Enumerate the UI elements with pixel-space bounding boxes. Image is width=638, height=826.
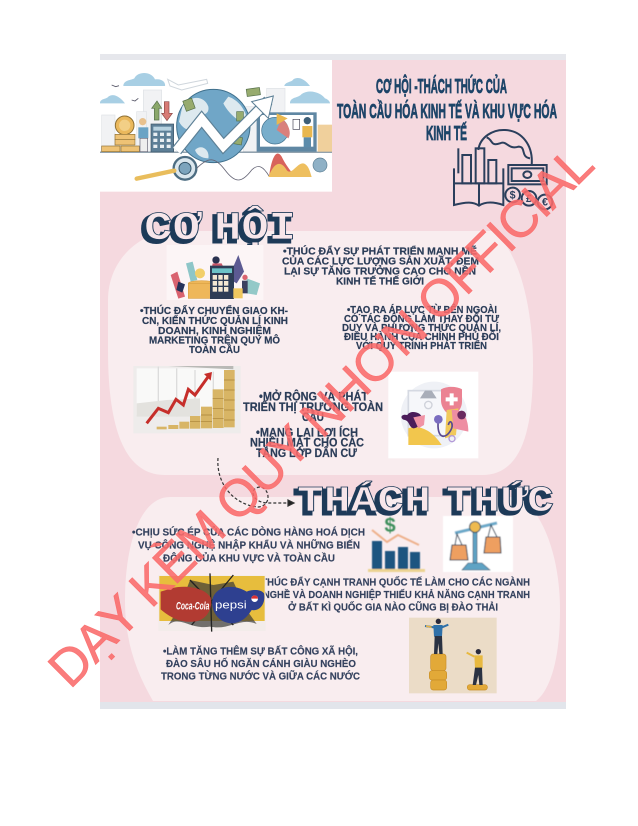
heading: opportunities [141, 204, 296, 255]
icon: globe, book, charts and money [454, 130, 552, 209]
text block: challenge, international competition: NGHỀ VÀ DOANH NGHIỆP THIẾU KHẢ NĂNG CẠNH TRANH [263, 588, 530, 601]
title: KINH TẾ [426, 122, 467, 145]
illustration: global economy header image [100, 60, 332, 192]
heading: opportunities: CƠ [144, 207, 203, 252]
panel: opportunities background [108, 231, 533, 475]
text block: opportunity, technology transfer: •THÚC ĐẨY CHUYỂN GIAO KH- [140, 304, 288, 317]
illustration: Coca-Cola versus Pepsi boxing gloves: pepsi [215, 600, 247, 612]
icon: balance scale with shopping bags [443, 516, 513, 572]
illustration: Coca-Cola versus Pepsi boxing gloves [158, 573, 266, 632]
text block: market expansion and benefits: •MANG LẠI LỢI ÍCH [256, 426, 358, 440]
text block: opportunity, external pressure [342, 303, 501, 352]
text block: market expansion and benefits: TẦNG LỚP DÂN CƯ [256, 447, 357, 460]
text block: challenge, social inequality: ĐÀO SÂU HỐ NGĂN CÁNH GIÀU NGHÈO [166, 656, 356, 670]
icon: globe, book, charts and money: € [542, 197, 548, 209]
text block: opportunity, external pressure: VỚI QUY TRÌNH PHÁT TRIỂN [356, 339, 487, 352]
heading: challenges: THỨC [443, 482, 551, 525]
title [337, 74, 557, 145]
text block: opportunity, external pressure: ĐIỀU HÀNH CỦA CHÍNH PHỦ ĐỐI [344, 329, 499, 343]
illustration: calculator and coins [167, 245, 263, 300]
text block: opportunity, technology transfer: CN, KIẾN THỨC QUẢN LÍ KINH [142, 314, 288, 327]
text block: market expansion and benefits: •MỞ RỘNG VÀ PHÁT [259, 390, 368, 404]
text block: opportunity, external pressure: DUY VÀ PHƯƠNG THỨC QUẢN LÍ, [342, 321, 501, 334]
text block: opportunity, technology transfer: MARKETING TRÊN QUY MÔ [149, 334, 280, 346]
arrow: dashed looped arrow to challenges heading [218, 458, 294, 507]
illustration: rising arrow and coin stacks [133, 366, 241, 433]
icon: globe, book, charts and money: $ [510, 190, 516, 202]
text block: opportunity, productive forces: •THÚC ĐẨY SỰ PHÁT TRIỂN MẠNH MẼ [283, 244, 477, 258]
text block: opportunity, productive forces: KINH TẾ THẾ GIỚI [336, 274, 424, 288]
text block: challenge, imported goods pressure: •CHỊU SỨC ÉP CỦA CÁC DÒNG HÀNG HOÁ DỊCH [132, 526, 365, 538]
text block: challenge, international competition: •THÚC ĐẨY CẠNH TRANH QUỐC TẾ LÀM CHO CÁC NGÀNH [258, 574, 530, 588]
heading: opportunities: CƠ [141, 210, 200, 255]
heading: challenges: THÁCH [294, 483, 428, 525]
watermark: DẠY KÈM QUY NHƠN OFFICIAL [38, 135, 605, 699]
text block: opportunity, productive forces: CỦA CÁC LỰC LƯỢNG SẢN XUẤT, ĐEM [282, 254, 479, 268]
text block: market expansion and benefits: CẦU [302, 411, 324, 424]
text block: challenge, social inequality: TRONG TỪNG NƯỚC VÀ GIỮA CÁC NƯỚC [161, 670, 360, 682]
text block: challenge, social inequality: •LÀM TĂNG THÊM SỰ BẤT CÔNG XÃ HỘI, [163, 644, 358, 658]
heading: challenges: THỨC [446, 479, 554, 522]
heading: opportunities: HỘI [214, 204, 296, 252]
text block: market expansion and benefits: TRIỂN THỊ TRƯỜNG TOÀN [243, 401, 383, 414]
text block: challenge, imported goods pressure: ĐỘNG CỦA KHU VỰC VÀ TOÀN CẦU [163, 552, 335, 564]
text block: opportunity, productive forces [282, 244, 479, 288]
heading: opportunities: HỘI [211, 207, 293, 255]
text block: opportunity, external pressure: •TẠO RA ÁP LỰC TỪ BÊN NGOÀI [347, 303, 497, 316]
text block: opportunity, technology transfer [140, 304, 288, 356]
text block: market expansion and benefits: NHIỀU MẶT CHO CÁC [250, 436, 364, 450]
poster background [100, 54, 566, 709]
illustration: doctor and stethoscope [388, 372, 478, 458]
heading: challenges: THÁCH [297, 480, 431, 522]
text block: challenge, international competition: Ở BẤT KÌ QUỐC GIA NÀO CŨNG BỊ ĐÀO THẢI [288, 600, 498, 614]
text block: challenge, social inequality [161, 644, 360, 682]
heading: challenges [294, 479, 554, 525]
text block: challenge, imported goods pressure: VỤ CÔNG NGHỆ NHẬP KHẨU VÀ NHỮNG BIẾN [138, 538, 360, 552]
text block: opportunity, technology transfer: TOÀN CẦU [189, 343, 240, 356]
icon: falling bar chart with dollar [368, 515, 425, 572]
text block: opportunity, technology transfer: DOANH, KINH NGHIỆM [158, 324, 271, 337]
text block: market expansion and benefits [243, 390, 383, 460]
icon: globe, book, charts and money: £ [526, 193, 532, 205]
text block: opportunity, productive forces: LẠI SỰ TĂNG TRƯỞNG CAO CHO NỀN [284, 264, 476, 278]
text block: challenge, imported goods pressure [132, 526, 365, 564]
text block: opportunity, external pressure: CÓ TÁC ĐỘNG LÀM THAY ĐỔI TƯ [344, 312, 499, 325]
panel: challenges background [125, 497, 560, 701]
icon: falling bar chart with dollar: $ [384, 515, 396, 537]
illustration: two men on unequal coin stacks [409, 618, 497, 693]
text block: challenge, international competition [258, 574, 530, 614]
illustration: Coca-Cola versus Pepsi boxing gloves: Coca-Cola [176, 600, 209, 612]
title: CƠ HỘI -THÁCH THỨC CỦA [376, 74, 507, 98]
